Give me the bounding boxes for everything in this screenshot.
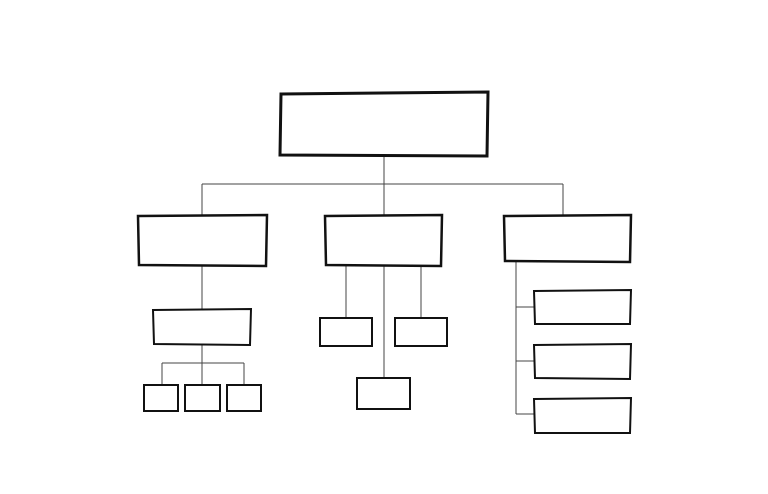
middle branch boxes — [320, 318, 447, 409]
right branch boxes — [534, 290, 631, 433]
left branch boxes — [144, 309, 261, 411]
level 2 boxes — [138, 215, 631, 266]
connectors — [162, 156, 563, 414]
top box — [280, 92, 488, 156]
